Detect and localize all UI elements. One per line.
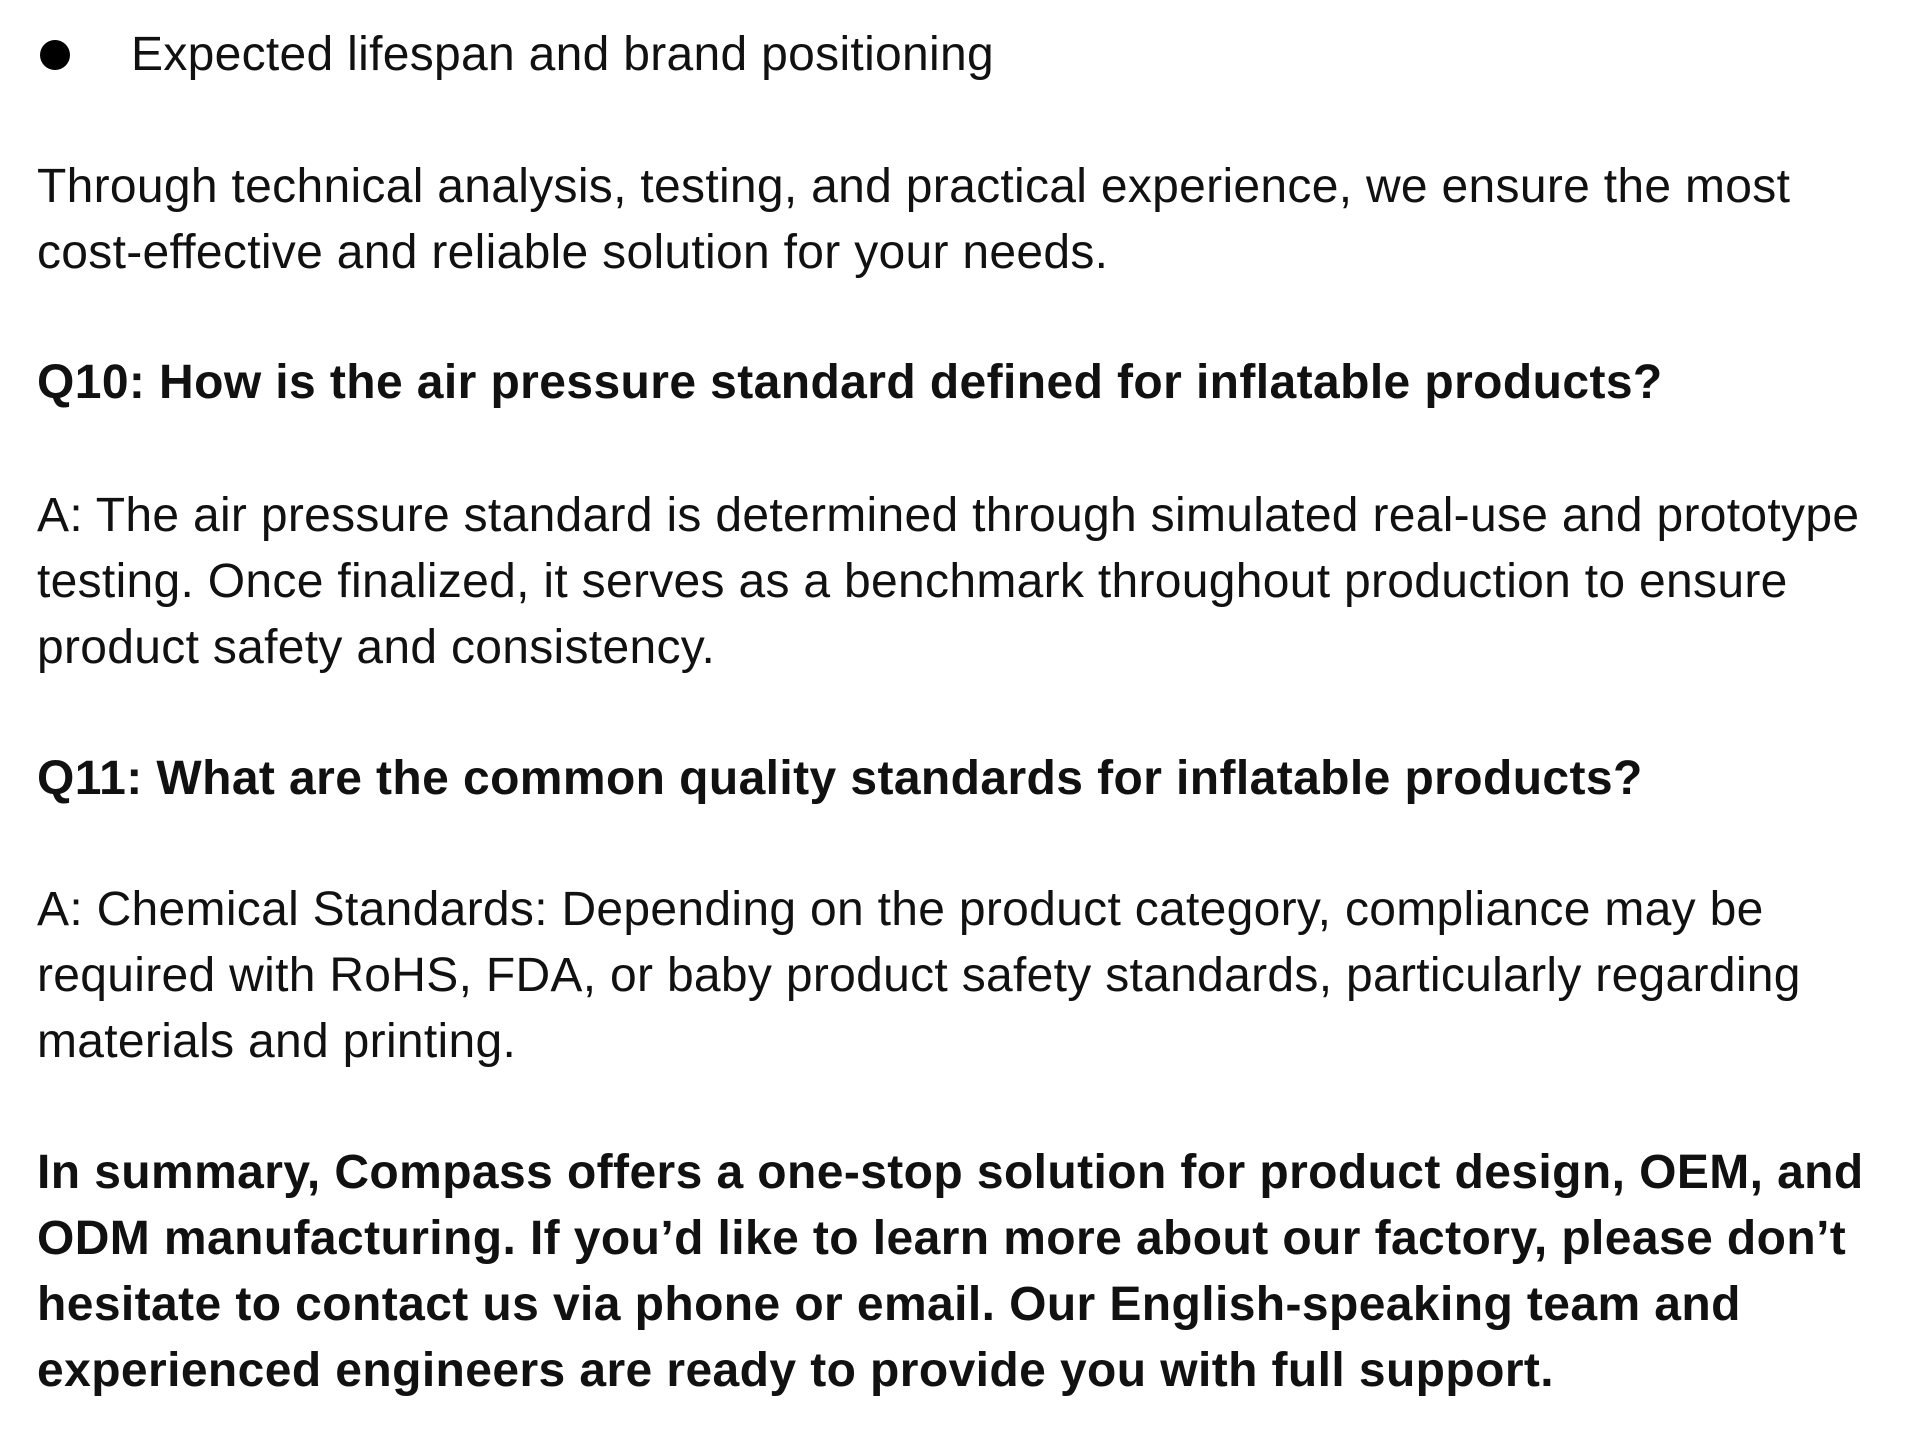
paragraph: A10 xyxy=(37,489,1859,674)
paragraph: A11: materials and printing. xyxy=(37,1015,516,1068)
paragraph: intro: cost-effective and reliable solution for your needs. xyxy=(37,226,1108,279)
heading: Q11: Q11: What are the common quality standards for inflatable products? xyxy=(37,752,1643,805)
summary paragraph: In summary, Compass offers a one-stop solution for product design, OEM, and xyxy=(37,1146,1864,1199)
paragraph: intro xyxy=(37,160,1790,279)
summary paragraph: experienced engineers are ready to provide you with full support. xyxy=(37,1344,1554,1397)
paragraph: intro: Through technical analysis, testing, and practical experience, we ensure the most xyxy=(37,160,1790,213)
paragraph: A11: A: Chemical Standards: Depending on the product category, compliance may be xyxy=(37,883,1764,936)
paragraph: A11: required with RoHS, FDA, or baby product safety standards, particularly regarding xyxy=(37,949,1801,1002)
paragraph: A10: product safety and consistency. xyxy=(37,621,715,674)
paragraph: A11 xyxy=(37,883,1801,1068)
bullet item xyxy=(40,28,994,81)
paragraph: A10: A: The air pressure standard is determined through simulated real-use and prototype xyxy=(37,489,1859,542)
summary paragraph: hesitate to contact us via phone or email. Our English-speaking team and xyxy=(37,1278,1741,1331)
bullet text: Expected lifespan and brand positioning xyxy=(131,28,994,81)
summary paragraph xyxy=(37,1146,1864,1397)
paragraph: A10: testing. Once finalized, it serves as a benchmark throughout production to ensure xyxy=(37,555,1788,608)
heading: Q10: Q10: How is the air pressure standard defined for inflatable products? xyxy=(37,356,1663,409)
summary paragraph: ODM manufacturing. If you’d like to learn more about our factory, please don’t xyxy=(37,1212,1846,1265)
icon: bullet dot xyxy=(40,40,70,70)
